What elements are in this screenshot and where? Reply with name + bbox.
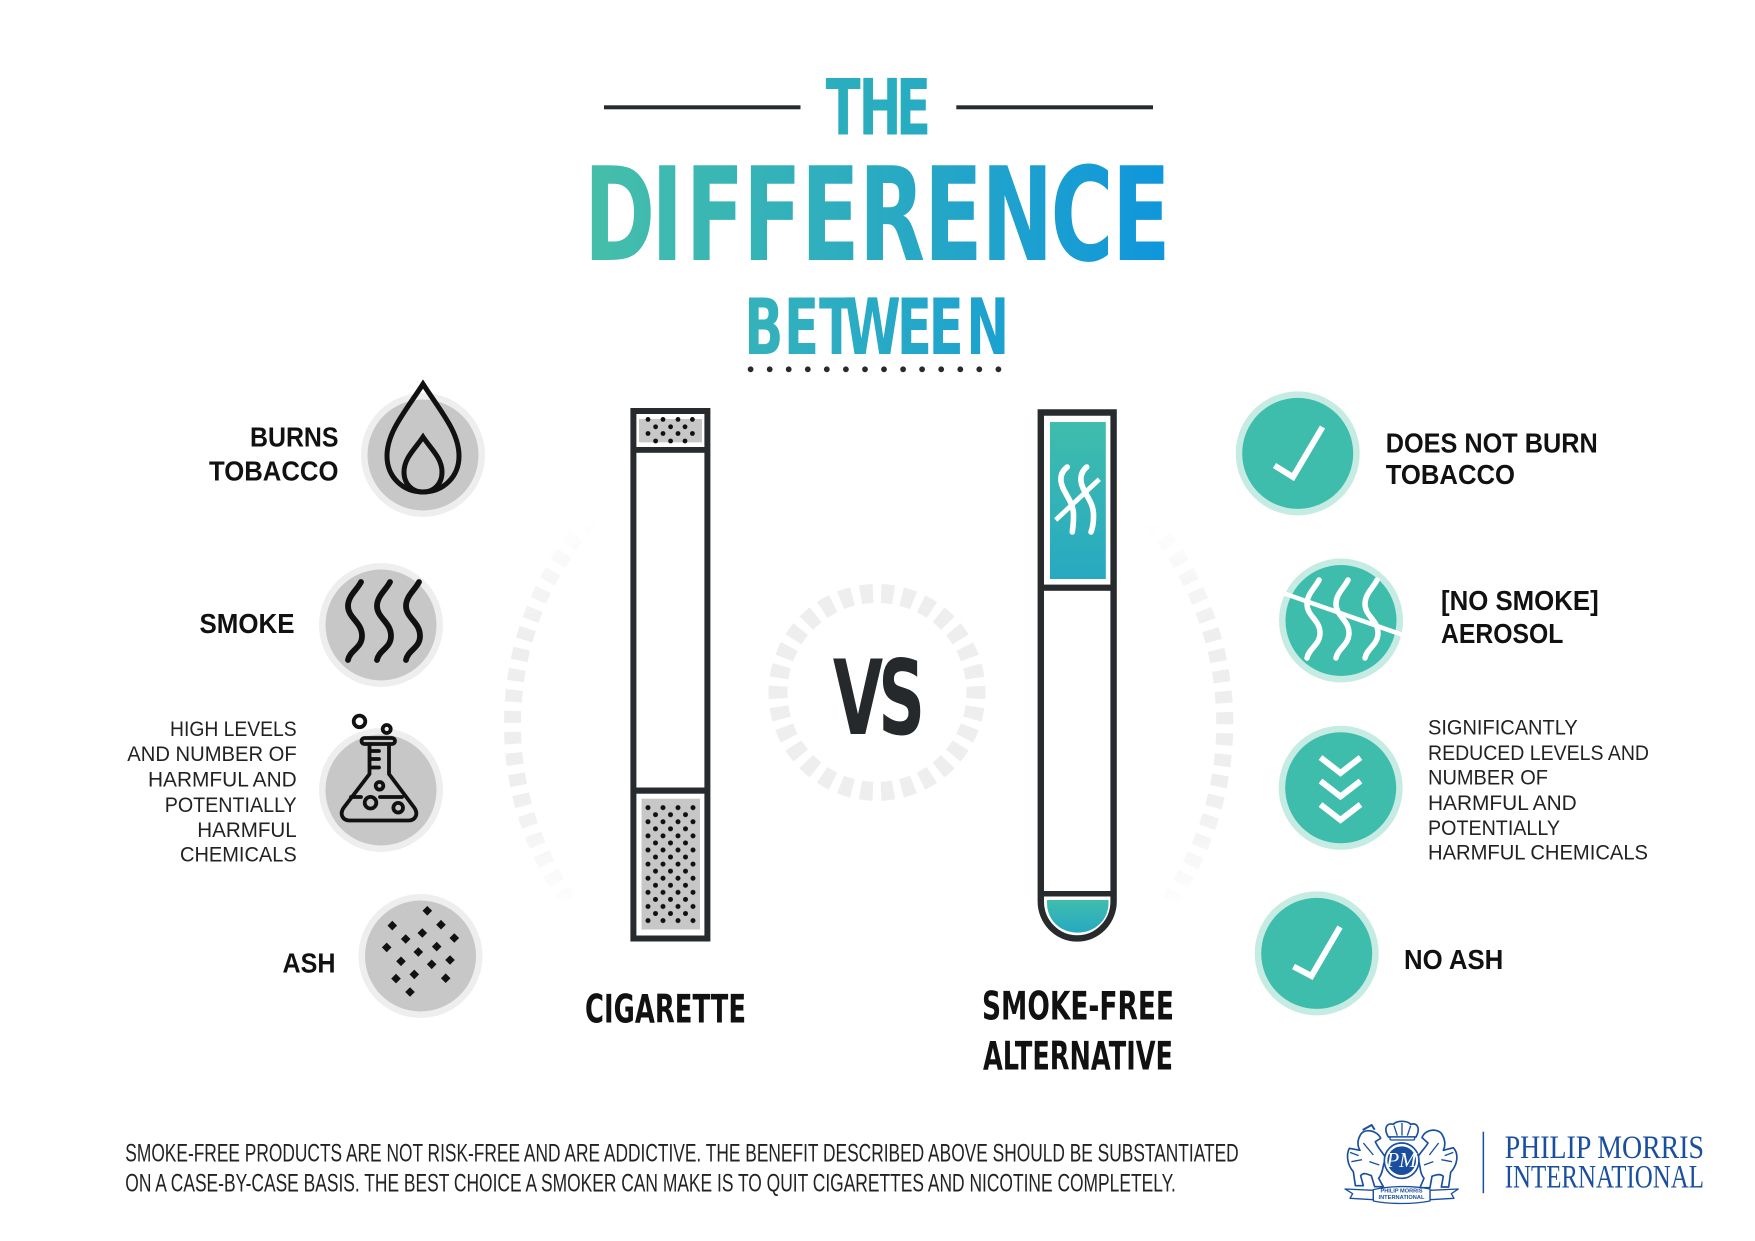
- item: smoke: [200, 563, 443, 687]
- disclaimer: SMOKE-FREE PRODUCTS ARE NOT RISK-FREE AND ARE ADDICTIVE. THE BENEFIT DESCRIBED ABOVE SHOULD BE SUBSTANTIATED: [125, 1141, 1239, 1168]
- label: smoke: SMOKE: [200, 608, 294, 639]
- label: high levels: [127, 717, 297, 866]
- icon: down chevrons: [1320, 758, 1360, 820]
- cigarette body: [633, 411, 707, 938]
- label: significantly reduced: REDUCED LEVELS AND: [1428, 741, 1649, 765]
- label: high levels: CHEMICALS: [180, 842, 297, 866]
- icon: no smoke mini: [1056, 467, 1099, 532]
- label: no smoke aerosol: AEROSOL: [1441, 618, 1563, 649]
- icon: flame: [387, 384, 459, 492]
- crest ribbon text: PHILIP MORRIS: [1380, 1188, 1423, 1194]
- icon: smoke waves: [348, 582, 420, 660]
- item: does not burn tobacco: [1236, 391, 1598, 515]
- panel: cigarette: [585, 411, 746, 1032]
- panel: smoke-free properties: [1236, 391, 1649, 1015]
- icon: ash particles: [382, 906, 459, 997]
- label: significantly reduced: POTENTIALLY: [1428, 816, 1560, 840]
- cigarette top section: [639, 417, 702, 443]
- label: high levels: HIGH LEVELS: [170, 717, 297, 741]
- crest ribbon text: [1378, 1188, 1424, 1201]
- label: CIGARETTE: CIGARETTE: [585, 988, 746, 1032]
- label: no ash: NO ASH: [1404, 944, 1503, 975]
- label: ash: ASH: [282, 948, 336, 979]
- icon: crossed waves: [1285, 580, 1402, 658]
- label: high levels: HARMFUL AND: [148, 768, 297, 792]
- teal top section: [1050, 422, 1106, 579]
- teal bottom cup: [1047, 900, 1108, 933]
- disclaimer: ON A CASE-BY-CASE BASIS. THE BEST CHOICE A SMOKER CAN MAKE IS TO QUIT CIGARETTES AND NICOTINE COMPLETELY.: [125, 1171, 1176, 1198]
- label: high levels: AND NUMBER OF: [127, 742, 297, 766]
- label: significantly reduced: NUMBER OF: [1428, 766, 1548, 790]
- title word: THE: THE: [826, 63, 931, 154]
- item: no ash: [1255, 891, 1503, 1015]
- label: SMOKE-FREE ALTERNATIVE: ALTERNATIVE: [983, 1035, 1173, 1080]
- label: significantly reduced: SIGNIFICANTLY: [1428, 716, 1578, 740]
- item: significantly reduced: [1279, 716, 1649, 865]
- dashed ring: [778, 593, 976, 791]
- upper divider: [1039, 585, 1116, 591]
- label: no smoke aerosol: [NO SMOKE]: [1441, 585, 1599, 616]
- lower divider: [1039, 891, 1116, 896]
- title word: DIFFERENCE: DIFFERENCE: [584, 140, 1171, 291]
- title rule left: [604, 105, 800, 109]
- item: high levels of chemicals: [127, 716, 443, 866]
- dotted underline: [748, 366, 1001, 372]
- title rule right: [956, 105, 1153, 109]
- VS text: VS: [833, 639, 925, 759]
- title: [584, 63, 1171, 373]
- device body: [1041, 412, 1114, 938]
- logo wordmark: PHILIP MORRIS: [1505, 1130, 1704, 1166]
- title word: BETWEEN: BETWEEN: [744, 282, 1009, 373]
- label: significantly reduced: HARMFUL CHEMICALS: [1428, 841, 1648, 865]
- crest ribbon text: INTERNATIONAL: [1378, 1195, 1424, 1201]
- item: no smoke aerosol: [1279, 558, 1599, 682]
- label: SMOKE-FREE ALTERNATIVE: SMOKE-FREE: [982, 985, 1174, 1030]
- panel: smoke-free alternative: [982, 412, 1174, 1080]
- label: does not burn tobacco: [1386, 427, 1598, 490]
- crest monogram: PM: [1385, 1148, 1418, 1172]
- icon: check: [1294, 927, 1340, 976]
- label: burns tobacco: TOBACCO: [209, 455, 338, 486]
- label: significantly reduced: [1428, 716, 1649, 865]
- filter divider: [632, 447, 709, 453]
- tobacco divider: [632, 788, 709, 794]
- label: significantly reduced: HARMFUL AND: [1428, 791, 1577, 815]
- panel: versus badge: [778, 593, 976, 791]
- icon: check: [1274, 427, 1322, 477]
- logo divider: [1483, 1132, 1484, 1193]
- icon: flask: [342, 716, 416, 820]
- icon: crest: [1345, 1121, 1458, 1203]
- label: does not burn tobacco: TOBACCO: [1386, 459, 1515, 490]
- label: SMOKE-FREE ALTERNATIVE: [982, 985, 1174, 1080]
- label: does not burn tobacco: DOES NOT BURN: [1386, 427, 1598, 458]
- label: no smoke aerosol: [1441, 585, 1599, 649]
- item: ash: [282, 894, 482, 1018]
- logo: Philip Morris International: [1345, 1121, 1704, 1203]
- logo wordmark: [1505, 1130, 1704, 1196]
- cigarette bottom section: [642, 799, 700, 930]
- label: high levels: POTENTIALLY: [165, 793, 297, 817]
- label: burns tobacco: BURNS: [250, 422, 338, 453]
- item: burns tobacco: [209, 384, 485, 517]
- panel: cigarette properties: [127, 384, 485, 1018]
- disclaimer: [125, 1141, 1239, 1198]
- label: high levels: HARMFUL: [197, 818, 297, 842]
- label: burns tobacco: [209, 422, 338, 486]
